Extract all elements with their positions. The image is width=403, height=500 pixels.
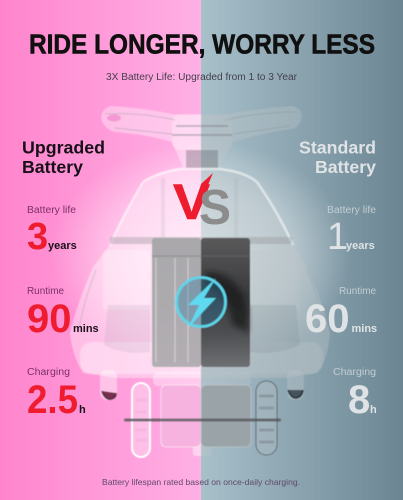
kart: right half	[200, 106, 330, 456]
battery ribs	[156, 258, 188, 362]
footnote: Battery lifespan rated based on once-daily charging.	[102, 477, 300, 487]
label: charging: Charging	[333, 367, 376, 378]
subtitle: 3X Battery Life: Upgraded from 1 to 3 Year	[106, 72, 298, 83]
kart: side panel right	[250, 305, 300, 353]
battery top strip	[110, 237, 292, 244]
kart: rear left wheel	[132, 383, 150, 457]
icon: circle	[176, 278, 226, 326]
kart: handlebar detail	[105, 112, 297, 134]
battery lid line	[152, 255, 250, 257]
kart: front foot left	[102, 391, 116, 399]
stat: 3 years: years	[48, 240, 77, 252]
vs: V flick	[201, 173, 213, 192]
label: charging: Charging	[27, 367, 70, 378]
kart: left half	[70, 106, 202, 456]
icon: bolt	[188, 278, 216, 328]
stat: 90 mins: mins	[73, 323, 99, 335]
background: grey-blue standard side	[201, 0, 403, 500]
kart: dome posts	[163, 178, 236, 240]
kart: front foot right	[288, 390, 303, 398]
vs badge	[173, 173, 231, 235]
kart: rear wheel ribs	[135, 400, 147, 440]
heading: upgraded: Upgraded	[22, 138, 105, 158]
panel: standard battery	[299, 138, 377, 422]
background: pink upgraded side	[0, 0, 201, 500]
kart: steering column	[186, 150, 218, 168]
stat: 1 years: years	[346, 240, 375, 252]
kart: dome outline	[110, 169, 293, 245]
label: battery life: Battery life	[327, 205, 376, 216]
stat: 2.5 h: 2.5	[27, 378, 78, 422]
kart: rear pink block	[161, 385, 201, 447]
stat: 2.5 h: h	[79, 404, 86, 416]
heading: standard: Standard	[299, 138, 376, 158]
transparent kart illustration	[70, 106, 330, 457]
kart: rear grey block	[201, 385, 251, 447]
stat: 8 h: h	[370, 404, 377, 416]
stat: 1 years: 1	[327, 216, 348, 258]
kart: rear right wheel	[256, 381, 277, 455]
label: battery life: Battery life	[27, 205, 76, 216]
kart: rear axle	[124, 418, 281, 422]
vs: V: V	[173, 174, 211, 230]
label: runtime: Runtime	[339, 286, 376, 297]
heading: standard: Battery	[315, 157, 376, 177]
battery dark arc	[205, 272, 248, 332]
heading: upgraded: Battery	[22, 157, 83, 177]
kart: rear right wheel ribs	[259, 396, 274, 442]
stat: 60 mins: mins	[352, 323, 377, 335]
vs: S: S	[199, 181, 231, 235]
stat: 3 years: 3	[27, 216, 48, 258]
panel: upgraded battery	[22, 138, 105, 422]
label: runtime: Runtime	[27, 286, 64, 297]
icon: lightning bolt in circle	[176, 278, 226, 328]
stat: 8 h: 8	[348, 378, 370, 422]
kart: side panel left	[104, 305, 150, 353]
battery right half	[201, 238, 250, 367]
kart: hub detail	[172, 126, 232, 135]
kart: handlebar pink spot	[107, 114, 121, 122]
stat: 90 mins: 90	[27, 297, 72, 341]
battery left half	[152, 238, 201, 367]
central glow	[51, 140, 351, 370]
stat: 60 mins: 60	[305, 297, 350, 341]
kart: lower body detail	[78, 270, 325, 333]
